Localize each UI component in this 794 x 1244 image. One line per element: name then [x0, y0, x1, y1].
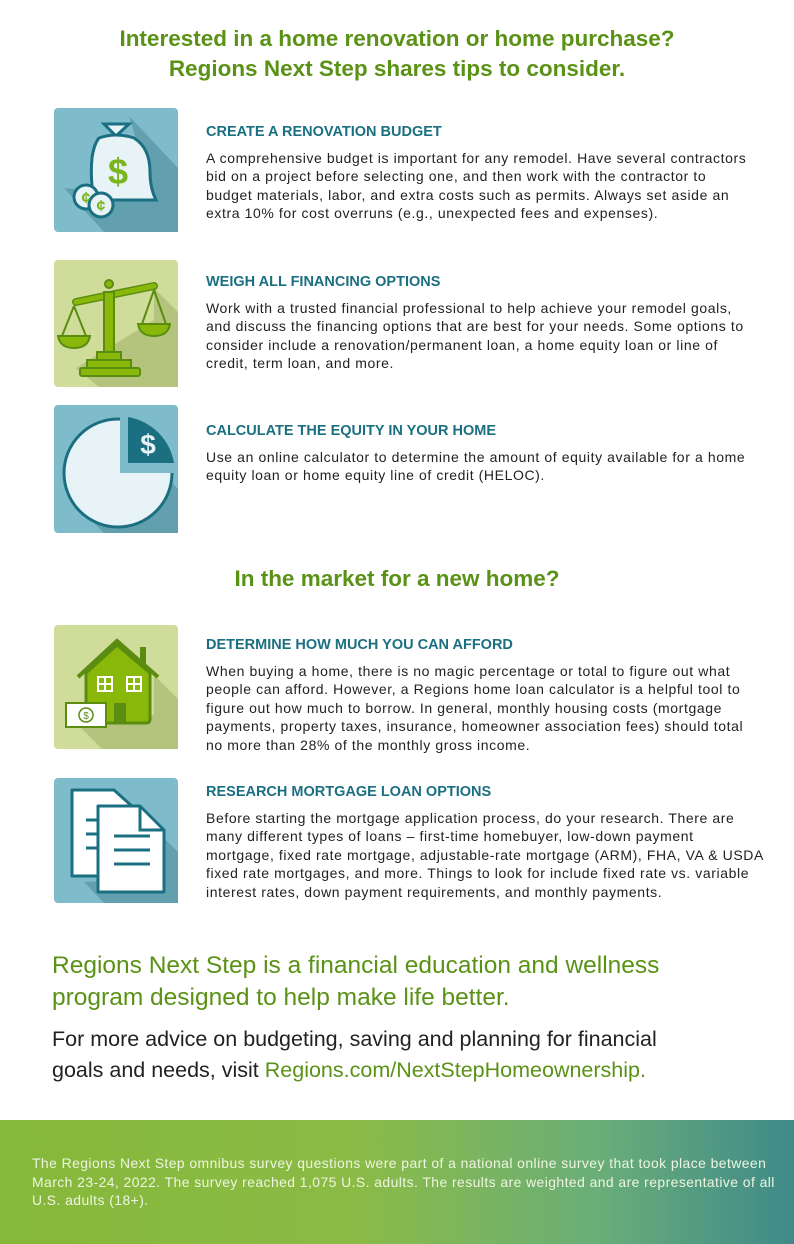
text: renovation budget: [206, 124, 746, 221]
text: program description: [52, 952, 659, 1011]
icon: money bag: $: [108, 151, 128, 192]
text: afford: payments, property taxes, insurance, homeowner association fees) should total: [206, 718, 743, 734]
text: renovation budget: budget materials, labor, and extra costs such as permits. Always set aside an: [206, 187, 729, 203]
text: afford: [206, 637, 743, 753]
icon: pie chart: [54, 405, 178, 533]
text: more advice: [52, 1027, 657, 1082]
footer: survey note: March 23-24, 2022. The survey reached 1,075 U.S. adults. The results are weighted and are representative of all: [32, 1174, 775, 1190]
text: mortgage options: RESEARCH MORTGAGE LOAN OPTIONS: [206, 784, 491, 800]
heading: new home: In the market for a new home?: [234, 566, 560, 591]
text: financing options: consider include a renovation/permanent loan, a home equity loan or line of: [206, 337, 718, 353]
title: Regions Next Step shares tips to consider.: [169, 56, 625, 81]
footer: survey note: The Regions Next Step omnibus survey questions were part of a national online survey that took place between: [32, 1155, 766, 1171]
text: financing options: Work with a trusted financial professional to help achieve your remodel goals,: [206, 300, 732, 316]
icon: house: [54, 625, 178, 749]
footer: survey note: U.S. adults (18+).: [32, 1192, 149, 1208]
text: renovation budget: A comprehensive budget is important for any remodel. Have several contractors: [206, 150, 746, 166]
text: mortgage options: fixed rate mortgages, and more. Things to look for include fixed rate vs. variable: [206, 865, 749, 881]
text: renovation budget: CREATE A RENOVATION BUDGET: [206, 124, 442, 140]
icon: scale: [54, 260, 178, 387]
text: afford: DETERMINE HOW MUCH YOU CAN AFFORD: [206, 637, 513, 653]
text: financing options: [206, 274, 744, 371]
text: equity: equity loan or home equity line of credit (HELOC).: [206, 467, 545, 483]
text: mortgage options: Before starting the mortgage application process, do your research. There are: [206, 810, 734, 826]
icon: pie chart: $: [140, 429, 156, 460]
icon: house: $: [83, 711, 89, 722]
icon: money bag: ¢: [82, 190, 91, 207]
text: equity: CALCULATE THE EQUITY IN YOUR HOME: [206, 423, 496, 439]
text: financing options: WEIGH ALL FINANCING OPTIONS: [206, 274, 440, 290]
text: program description: Regions Next Step is a financial education and wellness: [52, 952, 659, 979]
icon: documents: [54, 778, 178, 903]
text: afford: When buying a home, there is no magic percentage or total to figure out what: [206, 663, 730, 679]
text: more advice: For more advice on budgeting, saving and planning for financial: [52, 1027, 657, 1051]
text: afford: people can afford. However, a Regions home loan calculator is a helpful tool to: [206, 681, 740, 697]
title: Interested in a home renovation or home purchase?: [119, 26, 675, 51]
text: financing options: credit, term loan, and more.: [206, 355, 394, 371]
text: renovation budget: extra 10% for cost overruns (e.g., unexpected fees and expenses).: [206, 205, 658, 221]
text: mortgage options: [206, 784, 764, 900]
text: financing options: and discuss the financing options that are best for your needs. Some options to: [206, 318, 744, 334]
text: equity: Use an online calculator to determine the amount of equity available for a home: [206, 449, 745, 465]
title: [119, 26, 675, 81]
text: mortgage options: many different types of loans – first-time homebuyer, low-down payment: [206, 828, 694, 844]
text: mortgage options: mortgage, fixed rate mortgage, adjustable-rate mortgage (ARM), FHA, VA & USDA: [206, 847, 764, 863]
text: equity: [206, 423, 745, 483]
text: afford: no more than 28% of the monthly gross income.: [206, 737, 530, 753]
text: program description: program designed to help make life better.: [52, 984, 510, 1011]
text: afford: figure out how much to borrow. In general, monthly housing costs (mortgage: [206, 700, 722, 716]
text: mortgage options: interest rates, down payment requirements, and monthly payments.: [206, 884, 662, 900]
footer: survey note: [0, 1120, 794, 1244]
icon: money bag: [54, 108, 178, 232]
text: more advice: goals and needs, visit Regions.com/NextStepHomeownership.: [52, 1058, 646, 1082]
icon: money bag: ¢: [97, 198, 106, 215]
text: renovation budget: bid on a project before selecting one, and then work with the contractor to: [206, 168, 706, 184]
